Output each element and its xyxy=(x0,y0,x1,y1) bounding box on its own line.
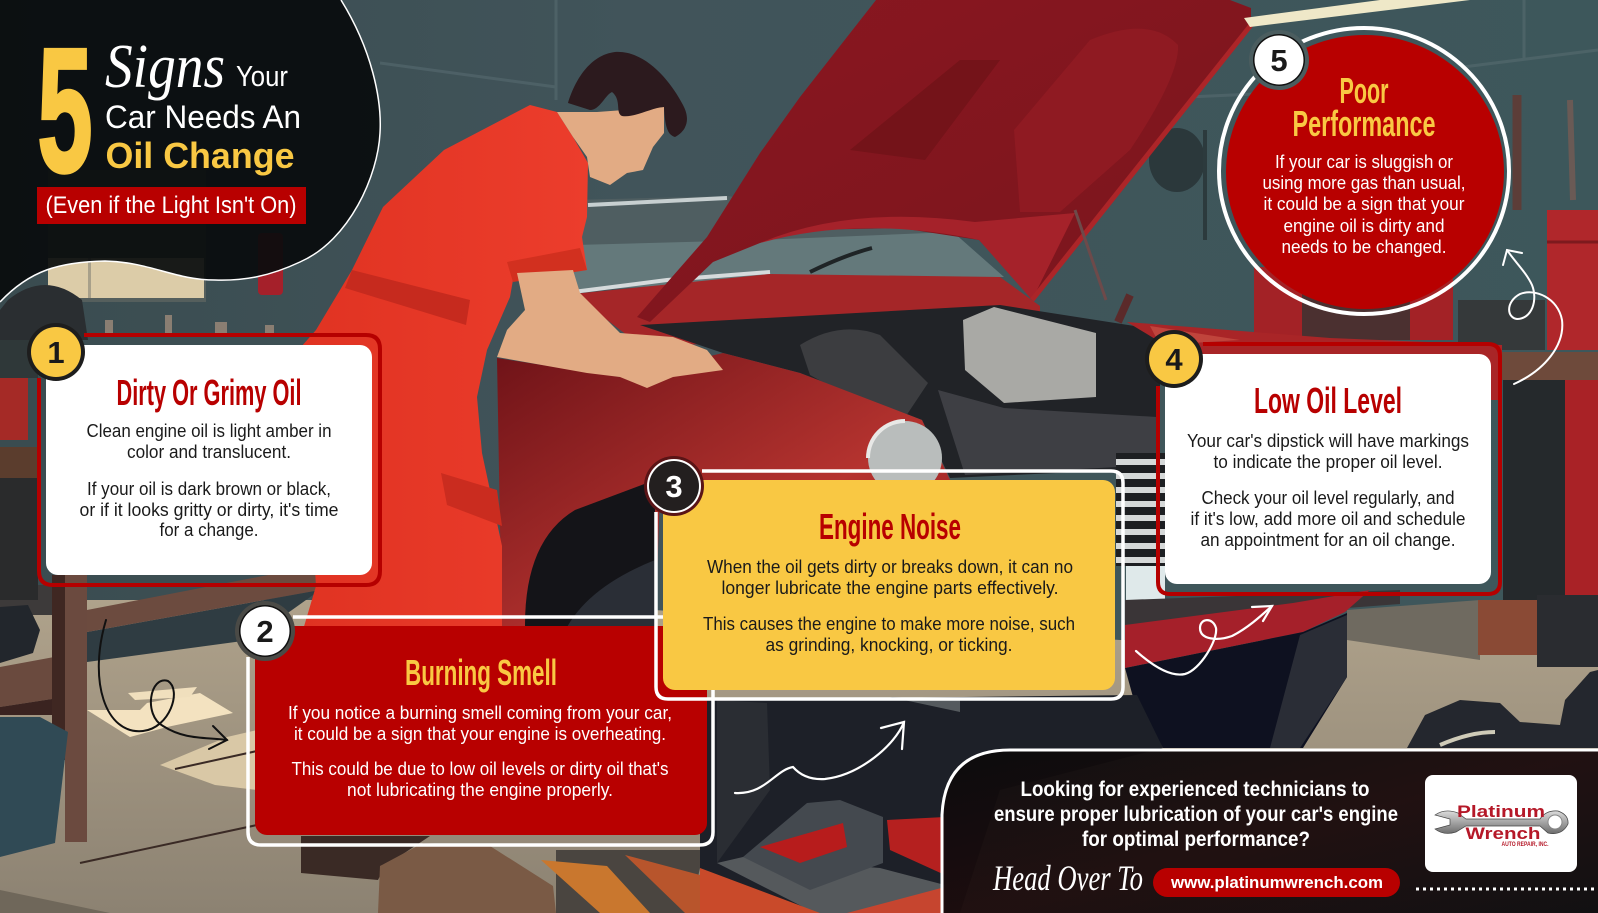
hood strut xyxy=(1075,210,1106,300)
shelf shadow xyxy=(87,590,320,662)
body text: as grinding, knocking, or ticking. xyxy=(766,635,1012,655)
body text: If your oil is dark brown or black, xyxy=(87,479,331,499)
panel 2: burning smell xyxy=(235,601,713,845)
grille xyxy=(1116,453,1165,566)
body text: to indicate the proper oil level. xyxy=(1214,452,1442,472)
card border xyxy=(1158,344,1500,594)
body text: not lubricating the engine properly. xyxy=(347,780,613,800)
footer call to action xyxy=(942,750,1598,913)
extinguisher xyxy=(258,233,283,295)
hair xyxy=(568,52,687,137)
mechanic boots xyxy=(301,836,430,880)
floor grey strip and orange markings xyxy=(717,857,945,913)
panel 5: poor performance xyxy=(1219,28,1509,314)
number badge 3 xyxy=(644,456,704,516)
number badge 1: 1 xyxy=(47,335,65,370)
number badge 3: 3 xyxy=(665,469,683,504)
heading: Low Oil Level xyxy=(1254,380,1402,421)
body text: needs to be changed. xyxy=(1282,237,1446,257)
ring xyxy=(1219,28,1509,314)
head xyxy=(557,107,664,185)
title: Your: Your xyxy=(236,61,288,93)
number badge 2: 2 xyxy=(256,614,274,649)
body text: if it's low, add more oil and schedule xyxy=(1190,509,1466,529)
red circle xyxy=(1226,35,1504,309)
headlight xyxy=(868,421,942,495)
title: Oil Change: Oil Change xyxy=(106,135,294,176)
body text: using more gas than usual, xyxy=(1262,173,1466,193)
foreground tyre right xyxy=(1407,670,1598,748)
body text: longer lubricate the engine parts effectively. xyxy=(722,578,1058,598)
arrow: to engine noise xyxy=(735,722,904,793)
logo xyxy=(1425,775,1577,872)
card xyxy=(663,480,1115,690)
footer text: Looking for experienced technicians to xyxy=(1020,778,1370,801)
arrow: to burning smell xyxy=(99,620,227,749)
body text: If your car is sluggish or xyxy=(1275,152,1453,172)
body text: Clean engine oil is light amber in xyxy=(86,421,332,441)
wall tools xyxy=(1149,128,1205,192)
body text: Check your oil level regularly, and xyxy=(1202,488,1454,508)
window xyxy=(48,170,206,302)
number badge 4 xyxy=(1145,330,1203,388)
number badge 2 xyxy=(235,601,295,661)
card border xyxy=(248,617,713,845)
body text xyxy=(1187,431,1469,550)
footer panel xyxy=(942,750,1598,913)
body text: This could be due to low oil levels or dirty oil that's xyxy=(292,759,668,779)
logo: Platinum xyxy=(1457,802,1545,821)
fluorescent light xyxy=(1244,0,1470,27)
body text xyxy=(1262,152,1466,257)
panel 3: engine noise xyxy=(644,456,1123,699)
footer text: for optimal performance? xyxy=(1082,828,1310,851)
heading: Poor xyxy=(1340,70,1388,111)
logo: Wrench xyxy=(1466,824,1540,843)
floor light patches xyxy=(87,693,233,737)
number badge 1 xyxy=(27,323,85,381)
title: Signs: Signs xyxy=(105,33,225,101)
big number 5: 5 xyxy=(38,13,92,209)
subtitle banner xyxy=(37,187,306,224)
card border xyxy=(656,471,1123,699)
card xyxy=(255,626,707,835)
front wheel xyxy=(1125,613,1347,748)
body text: If you notice a burning smell coming from your car, xyxy=(288,703,672,723)
body text: engine oil is dirty and xyxy=(1284,216,1444,236)
footer text: ensure proper lubrication of your car's engine xyxy=(994,803,1398,826)
bin xyxy=(0,717,68,857)
panel 4: low oil level xyxy=(1145,330,1500,594)
card xyxy=(1165,354,1491,584)
tool box xyxy=(743,800,883,890)
logo: AUTO REPAIR, INC. xyxy=(1502,842,1549,848)
body text: for a change. xyxy=(160,520,258,540)
engine xyxy=(963,307,1096,403)
arrow: to poor performance xyxy=(1503,250,1562,384)
cloth xyxy=(0,605,40,663)
body and fender xyxy=(497,353,950,640)
body text xyxy=(703,557,1075,655)
car right fender xyxy=(1127,322,1502,400)
heading xyxy=(1292,70,1436,144)
body text: When the oil gets dirty or breaks down, it can no xyxy=(707,557,1073,577)
body text: it could be a sign that your xyxy=(1264,194,1464,214)
engine bay xyxy=(640,305,1160,478)
right side garage xyxy=(1254,267,1302,340)
heading: Performance xyxy=(1292,103,1436,144)
red crate xyxy=(887,817,945,875)
body text xyxy=(80,421,338,540)
arrow: to low oil level xyxy=(1136,606,1272,675)
number badge 5: 5 xyxy=(1270,43,1288,78)
header blob background xyxy=(0,0,380,302)
body text: it could be a sign that your engine is overheating. xyxy=(294,724,666,744)
floor xyxy=(0,600,1598,913)
panel 1: dirty or grimy oil xyxy=(27,323,380,585)
dotted line xyxy=(1416,888,1598,890)
subtitle text: (Even if the Light Isn't On) xyxy=(46,192,296,219)
footer text xyxy=(994,778,1398,851)
bottles on shelf xyxy=(105,315,274,334)
blob outline xyxy=(0,0,380,302)
left table and bottle xyxy=(0,447,38,478)
body text: an appointment for an oil change. xyxy=(1200,530,1456,550)
card xyxy=(46,345,372,575)
hood xyxy=(637,0,1251,322)
title: Car Needs An: Car Needs An xyxy=(105,99,301,135)
heading: Burning Smell xyxy=(405,652,557,693)
number badge 5 xyxy=(1249,30,1309,90)
shelf xyxy=(87,565,320,632)
header panel xyxy=(0,0,380,302)
body text: or if it looks gritty or dirty, it's time xyxy=(80,500,338,520)
windshield xyxy=(570,196,1004,292)
heading: Dirty Or Grimy Oil xyxy=(116,372,302,413)
body text: This causes the engine to make more noise, such xyxy=(703,614,1075,634)
card border xyxy=(39,335,380,585)
red rags in tool box xyxy=(760,823,847,863)
url pill xyxy=(1153,868,1400,897)
body text: color and translucent. xyxy=(127,442,291,462)
heading: Engine Noise xyxy=(819,506,961,547)
car lower red skirt xyxy=(1125,590,1370,668)
floor under car xyxy=(700,695,1163,913)
number badge 4: 4 xyxy=(1165,342,1183,377)
body text: Your car's dipstick will have markings xyxy=(1187,431,1469,451)
car cowl xyxy=(573,274,1040,345)
arm xyxy=(497,270,723,388)
mechanic suit xyxy=(300,105,588,640)
wheel arch xyxy=(525,480,655,640)
body text xyxy=(288,703,672,800)
url pill: www.platinumwrench.com xyxy=(1170,873,1383,892)
head over to: Head Over To xyxy=(992,858,1143,898)
